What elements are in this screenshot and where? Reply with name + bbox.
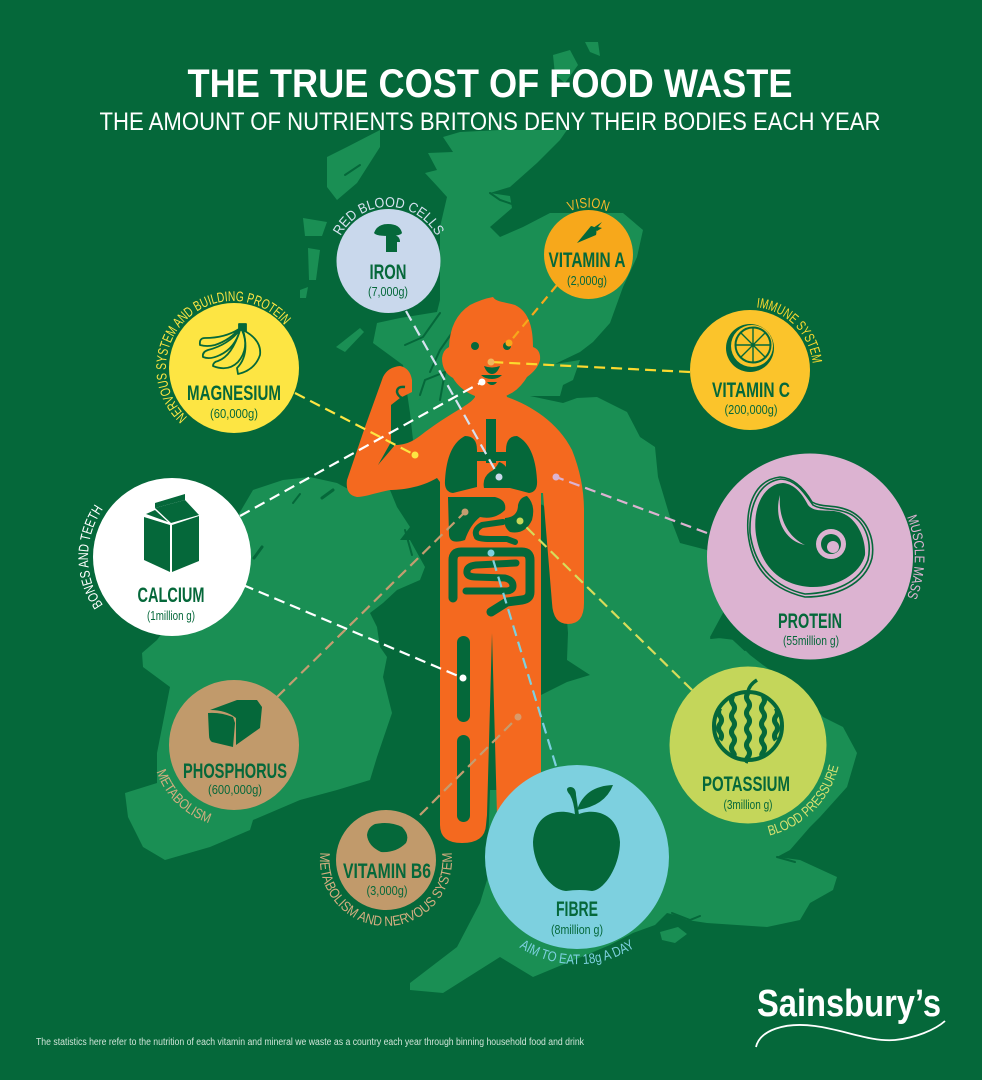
footnote: The statistics here refer to the nutrition of each vitamin and mineral we waste as a country each year through binning household food and drink (36, 1037, 585, 1048)
panel: phosphorus (156, 680, 299, 823)
torso arms and legs (347, 366, 584, 843)
connector: potassium (520, 521, 692, 690)
fibre disc (485, 765, 669, 949)
connector: vitamin C (491, 362, 690, 372)
protein benefit: MUSCLE MASS (907, 514, 924, 599)
connector: calcium bones (243, 585, 463, 678)
face (471, 342, 511, 385)
fibre benefit: AIM TO EAT 18g A DAY (519, 939, 632, 965)
calcium label: CALCIUM (138, 584, 204, 607)
stomach (505, 496, 533, 532)
logo swoosh (756, 1021, 945, 1047)
magnesium amount: (60,000g) (210, 406, 258, 421)
panel: potassium (670, 666, 838, 836)
panel: vitamin A (544, 198, 633, 299)
connector: protein (556, 477, 707, 533)
logo: Sainsbury's (756, 983, 945, 1047)
vitamin C benefit: IMMUNE SYSTEM (757, 298, 822, 363)
magnesium benefit: NERVOUS SYSTEM AND BUILDING PROTEIN (156, 291, 292, 424)
panel: vitamin B6 (320, 810, 452, 926)
intestines (453, 522, 530, 612)
icon: apple (533, 785, 620, 891)
icon: milk carton (144, 494, 199, 572)
connector: calcium teeth (240, 382, 482, 516)
panel: magnesium (156, 291, 299, 433)
human body figure (347, 297, 584, 843)
potassium label: POTASSIUM (702, 773, 790, 796)
connector: iron (406, 311, 499, 477)
vitamin A label: VITAMIN A (548, 249, 626, 272)
vitamin A amount: (2,000g) (567, 273, 607, 288)
connector: vitamin B6 (420, 717, 518, 815)
leg bones (457, 636, 470, 822)
connector: phosphorus (277, 512, 465, 697)
protein disc (707, 454, 913, 660)
map lochs and inlets (254, 165, 795, 920)
magnesium disc (169, 303, 299, 433)
icon: watermelon (714, 680, 782, 761)
fibre amount: (8million g) (551, 922, 603, 937)
protein label: PROTEIN (778, 610, 842, 633)
calcium benefit: BONES AND TEETH (78, 504, 103, 610)
vitamin A disc (544, 210, 633, 299)
potassium amount: (3million g) (724, 797, 772, 812)
lungs and trachea (445, 419, 537, 493)
vitamin B6 benefit: METABOLISM AND NERVOUS SYSTEM (320, 853, 452, 926)
iron label: IRON (370, 261, 406, 284)
fist curl (397, 387, 405, 398)
vitamin B6 label: VITAMIN B6 (343, 860, 431, 883)
panel: protein (707, 454, 924, 660)
icon: carrot (577, 222, 602, 243)
iron benefit: RED BLOOD CELLS (332, 197, 444, 236)
iron disc (336, 209, 440, 313)
title: THE TRUE COST OF FOOD WASTE (188, 62, 792, 106)
logo wordmark: Sainsbury’s (757, 983, 941, 1025)
phosphorus disc (169, 680, 299, 810)
panel: calcium (78, 478, 251, 636)
panel: vitamin C (690, 298, 822, 430)
heart (484, 462, 513, 488)
connector: fibre (491, 553, 556, 766)
map of Britain and Ireland (125, 42, 857, 993)
head (442, 297, 540, 396)
icon: mushrooms (374, 224, 402, 252)
decorative island group (327, 130, 380, 200)
icon: potato (367, 823, 407, 852)
panel: iron (332, 197, 444, 313)
calcium amount: (1million g) (147, 608, 195, 623)
connector: vitamin A (509, 285, 557, 343)
iron amount: (7,000g) (368, 284, 408, 299)
liver (448, 497, 505, 542)
potassium disc (670, 666, 826, 824)
potassium benefit: BLOOD PRESSURE (768, 764, 838, 836)
vitamin A benefit: VISION (566, 198, 610, 211)
panel: fibre (485, 765, 669, 965)
fibre label: FIBRE (556, 898, 598, 921)
vitamin B6 amount: (3,000g) (366, 883, 408, 898)
phosphorus label: PHOSPHORUS (183, 760, 287, 783)
vitamin C disc (690, 310, 810, 430)
phosphorus amount: (600,000g) (208, 782, 262, 797)
connector: magnesium (295, 393, 415, 455)
icon: bread loaf (208, 700, 262, 747)
calcium disc (93, 478, 251, 636)
phosphorus benefit: METABOLISM (156, 768, 212, 823)
vitamin B6 disc (336, 810, 436, 910)
connector end dots (412, 340, 560, 720)
icon: citrus slice (726, 324, 774, 372)
protein amount: (55million g) (783, 633, 839, 648)
subtitle: THE AMOUNT OF NUTRIENTS BRITONS DENY THEIR BODIES EACH YEAR (100, 108, 880, 136)
icon: bananas (200, 324, 260, 374)
vitamin C amount: (200,000g) (724, 402, 778, 417)
icon: steak (748, 477, 873, 597)
vitamin C label: VITAMIN C (712, 379, 790, 402)
magnesium label: MAGNESIUM (187, 382, 281, 405)
